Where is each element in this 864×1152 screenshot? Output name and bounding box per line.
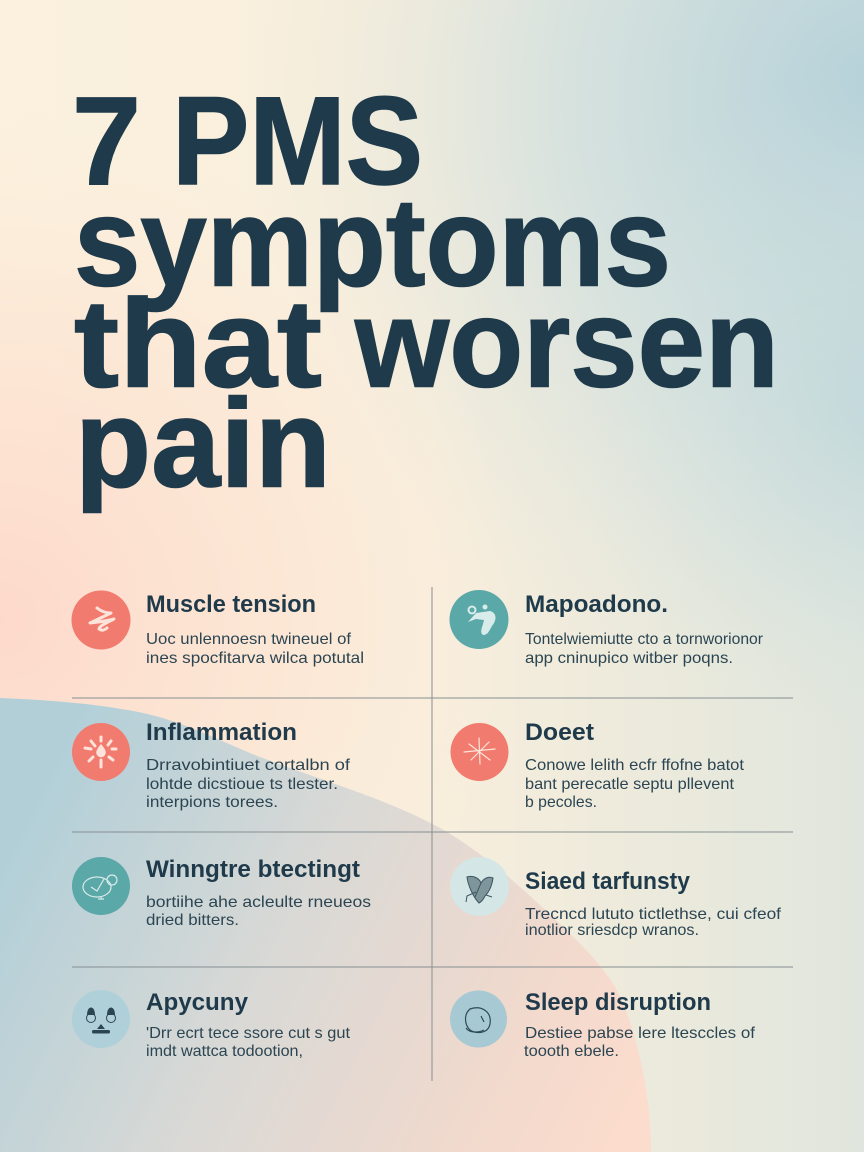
icon: inflammation burst [72, 723, 130, 781]
description: b pecoles. [525, 794, 597, 811]
description: Tontelwiemiutte cto a tornworionor [525, 631, 764, 648]
title: 7 [72, 72, 141, 211]
item: Winngtre btectingt [72, 856, 371, 929]
description [146, 894, 371, 929]
heading: Mapoadono. [525, 591, 668, 618]
icon: sleep outline [450, 990, 507, 1048]
description: Conowe lelith ecfr ffofne batot [525, 757, 745, 774]
description [146, 1025, 351, 1060]
heading: Winngtre btectingt [146, 856, 360, 883]
grid divider lines [72, 587, 793, 1081]
item: Inflammation [72, 719, 351, 811]
description [525, 906, 782, 939]
icon: outline creature [72, 857, 130, 915]
description [524, 1025, 756, 1060]
description: lohtde dicstioue ts tlester. [146, 776, 338, 793]
heading: Sleep disruption [525, 989, 711, 1016]
title: symptoms [74, 174, 671, 312]
icon: muscle squiggle [72, 590, 130, 650]
title: PMS [172, 72, 423, 211]
icon: spark [450, 723, 508, 781]
item: Doeet [450, 719, 745, 811]
description: toooth ebele. [524, 1043, 619, 1060]
title: pain [75, 374, 331, 514]
title: worsen [354, 274, 779, 414]
description [146, 631, 364, 667]
heading: Siaed tarfunsty [525, 868, 691, 895]
title [72, 72, 779, 514]
heading: Doeet [525, 719, 594, 746]
description: Drravobintiuet cortalbn of [146, 757, 351, 774]
description: Trecncd lututo tictlethse, cui cfeof [525, 906, 782, 923]
icon: figure [450, 590, 508, 649]
description: inotlior sriesdcp wranos. [525, 922, 699, 939]
description: imdt wattca todootion, [146, 1043, 303, 1060]
description: ines spocfitarva wilca potutal [146, 650, 364, 667]
description [525, 757, 745, 811]
description: bortiihe ahe acleulte rneueos [146, 894, 371, 911]
description [525, 631, 764, 667]
description: dried bitters. [146, 912, 239, 929]
background curved shape [0, 698, 651, 1152]
description: 'Drr ecrt tece ssore cut s gut [146, 1025, 351, 1042]
description: interpions torees. [146, 794, 278, 811]
description: app cninupico witber poqns. [525, 650, 733, 667]
title: that [74, 274, 322, 414]
heading: Inflammation [146, 719, 297, 746]
heading: Muscle tension [146, 591, 316, 618]
item: Sleep disruption [450, 989, 756, 1060]
item: Apycuny [72, 989, 351, 1060]
icon: leaf wings [450, 857, 509, 916]
icon: face [72, 990, 130, 1048]
description: Destiee pabse lere ltesccles of [525, 1025, 756, 1042]
description [146, 757, 351, 811]
heading: Apycuny [146, 989, 249, 1016]
description: bant perecatle septu pllevent [525, 776, 735, 793]
item: Muscle tension [72, 590, 364, 667]
item: Mapoadono [450, 590, 764, 667]
item: Siaed tarfunsty [450, 857, 782, 939]
description: Uoc unlennoesn twineuel of [146, 631, 352, 648]
